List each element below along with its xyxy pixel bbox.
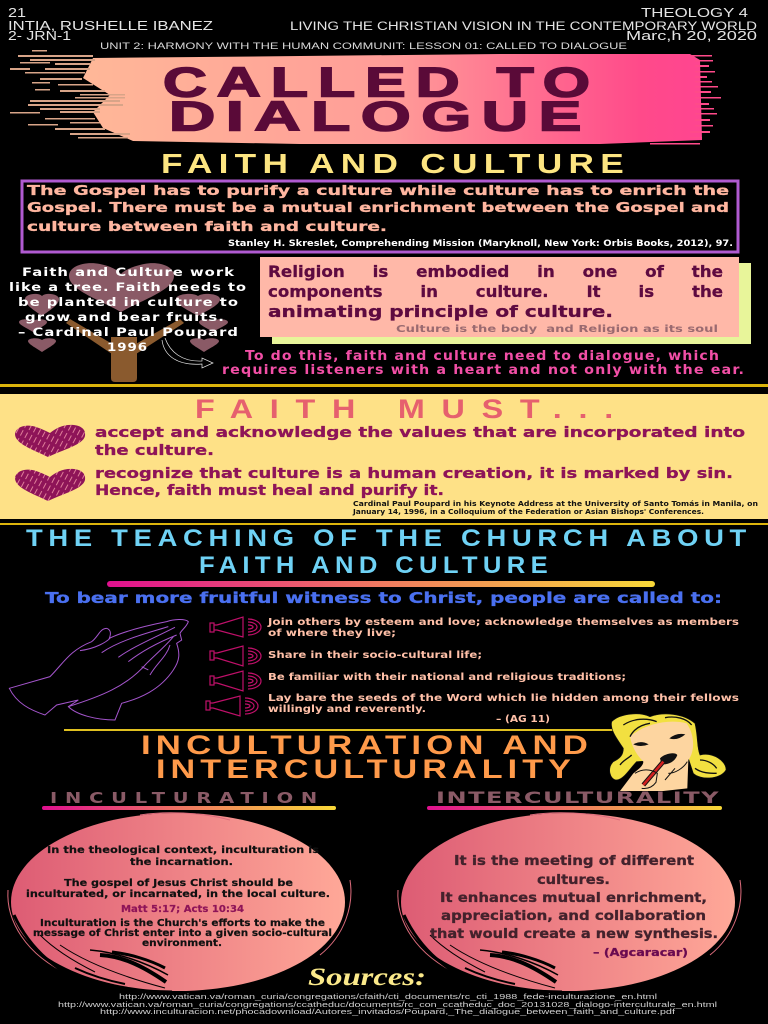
header: student details: 2- JRN-1: [8, 29, 71, 43]
panel: inculturation circle: environment.: [142, 938, 222, 949]
arrow: [162, 338, 213, 368]
religion panel: Religion is embodied in one of the: [268, 262, 723, 281]
heading: sources: Sources:: [308, 964, 426, 991]
tree caption: like a tree. Faith needs to: [9, 280, 247, 294]
unit line: UNIT 2: HARMONY WITH THE HUMAN COMMUNIT: LESSON 01: CALLED TO DIALOGUE: [100, 41, 627, 52]
heading: inculturation and interculturality: [141, 730, 593, 784]
heading: teaching of the church: FAITH AND CULTURE: [199, 552, 553, 579]
tree caption: – Cardinal Paul Poupard: [18, 325, 239, 339]
list of calls: [267, 617, 739, 725]
header: student details: [8, 6, 213, 43]
citation: January 14, 1996, in a Colloquium of the Federation or Asian Bishops' Conferences.: [352, 508, 704, 516]
panel: inculturation circle: the incarnation.: [130, 857, 233, 868]
panel: interculturality circle: – (Agcaracar): [593, 946, 688, 959]
header: student details: 21: [8, 6, 26, 20]
icon: heart 1: [15, 425, 85, 457]
tree caption: Faith and Culture work: [22, 265, 235, 279]
panel: interculturality circle: It is the meeting of different: [454, 853, 695, 869]
icon: heart 2: [15, 469, 85, 501]
label: inculturation: INCULTURATION: [50, 789, 325, 807]
title brush stroke: [10, 50, 721, 144]
tree caption: grow and bear fruits.: [25, 310, 225, 324]
religion panel: components in culture. It is the: [268, 282, 723, 301]
list of calls: Lay bare the seeds of the Word which lie hidden among their fellows: [268, 693, 739, 704]
divider: [0, 384, 768, 387]
icon: megaphone 3: [210, 671, 261, 691]
panel: inculturation circle: [8, 813, 351, 992]
panel: inculturation circle: The gospel of Jesus Christ should be: [64, 878, 293, 889]
heading: faith and culture: FAITH AND CULTURE: [161, 148, 630, 179]
divider: [0, 523, 768, 525]
list of calls: Share in their socio-cultural life;: [268, 650, 482, 661]
icon: megaphone 4: [206, 696, 258, 716]
panel: interculturality circle: cultures.: [537, 872, 610, 888]
religion panel: Culture is the body and Religion as its soul: [396, 324, 718, 335]
panel: inculturation circle: Matt 5:17; Acts 10:34: [121, 904, 244, 915]
heading: teaching of the church: [26, 525, 752, 579]
quote panel: Stanley H. Skreslet, Comprehending Mission (Maryknoll, New York: Orbis Books, 2012), 97.: [228, 239, 733, 249]
label: interculturality: [427, 788, 722, 810]
points: [95, 425, 745, 499]
panel: faith must: [0, 394, 768, 519]
points: Hence, faith must heal and purify it.: [95, 483, 444, 499]
header: student details: INTIA, RUSHELLE IBANEZ: [8, 19, 213, 33]
icon: megaphone 1: [210, 617, 261, 637]
panel: inculturation circle: In the theological context, inculturation is: [47, 845, 319, 856]
source links: http://www.vatican.va/roman_curia/congregations/ccatheduc/documents/rc_con_ccatheduc_doc_20131028_dialogo-interculturale_en.html: [58, 1000, 717, 1009]
panel: inculturation circle: message of Christ enter into a given socio-cultural: [33, 928, 332, 939]
source links: [58, 992, 717, 1016]
list of calls: of where they live;: [268, 628, 396, 639]
citation: Cardinal Paul Poupard in his Keynote Address at the University of Santo Tomás in Manila, on: [353, 500, 758, 508]
heading: inculturation and interculturality: INCULTURATION AND: [141, 730, 593, 760]
label: interculturality: INTERCULTURALITY: [436, 788, 720, 807]
religion panel: animating principle of culture.: [268, 302, 613, 321]
citation: [352, 500, 758, 516]
quote panel: The Gospel has to purify a culture while culture has to enrich the: [27, 183, 729, 199]
tree caption: be planted in culture to: [18, 295, 239, 309]
dialogue statement: requires listeners with a heart and not only with the ear.: [222, 363, 745, 378]
religion panel: [260, 257, 751, 344]
icon: retro woman: [610, 714, 726, 791]
label: inculturation: [42, 789, 336, 810]
panel: inculturation circle: Inculturation is the Church's efforts to make the: [40, 918, 325, 929]
list of calls: willingly and reverently.: [268, 704, 426, 715]
panel: interculturality circle: [398, 813, 741, 992]
panel: inculturation circle: inculturated, or incarnated, in the local culture.: [26, 889, 330, 900]
dialogue statement: [222, 349, 745, 378]
list of calls: Join others by esteem and love; acknowledge themselves as members: [267, 617, 739, 628]
header: course details: [290, 6, 757, 43]
header: course details: Marc,h 20, 2020: [626, 29, 757, 43]
source links: http://www.vatican.va/roman_curia/congregations/cfaith/cti_documents/rc_cti_1988_fede-inculturazione_en.html: [119, 992, 657, 1001]
divider: [64, 729, 613, 731]
header: course details: LIVING THE CHRISTIAN VISION IN THE CONTEMPORARY WORLD: [290, 21, 757, 33]
tree caption: 1996: [107, 340, 148, 354]
title: CALLED TO: [163, 58, 600, 106]
gradient bar: [107, 581, 655, 587]
source links: http://www.inculturacion.net/phocadownload/Autores_invitados/Poupard,_The_dialogue_between_faith_and_culture.pdf: [100, 1007, 676, 1016]
subheading: To bear more fruitful witness to Christ, people are called to:: [45, 589, 722, 607]
panel: interculturality circle: that would create a new synthesis.: [430, 926, 718, 942]
heading: teaching of the church: THE TEACHING OF THE CHURCH ABOUT: [26, 525, 752, 552]
tree illustration: [19, 263, 228, 382]
icon: megaphone 2: [210, 646, 261, 666]
dialogue statement: To do this, faith and culture need to dialogue, which: [245, 349, 720, 364]
points: recognize that culture is a human creation, it is marked by sin.: [95, 466, 733, 482]
heading: inculturation and interculturality: INTERCULTURALITY: [156, 754, 576, 784]
heading: faith must: FAITH MUST...: [195, 394, 630, 424]
quote panel: [22, 181, 738, 252]
header: course details: THEOLOGY 4: [641, 6, 748, 20]
title: DIALOGUE: [169, 92, 592, 140]
list of calls: – (AG 11): [496, 714, 550, 725]
panel: interculturality circle: appreciation, and collaboration: [441, 908, 706, 924]
panel: interculturality circle: It enhances mutual enrichment,: [440, 890, 707, 906]
quote panel: culture between faith and culture.: [27, 219, 387, 235]
title: [163, 58, 600, 140]
points: accept and acknowledge the values that are incorporated into: [95, 425, 745, 441]
tree caption: [9, 265, 247, 354]
icon: praying hands: [9, 620, 188, 720]
list of calls: Be familiar with their national and religious traditions;: [268, 672, 626, 683]
points: the culture.: [95, 443, 214, 459]
quote panel: Gospel. There must be a mutual enrichment between the Gospel and: [27, 200, 729, 216]
